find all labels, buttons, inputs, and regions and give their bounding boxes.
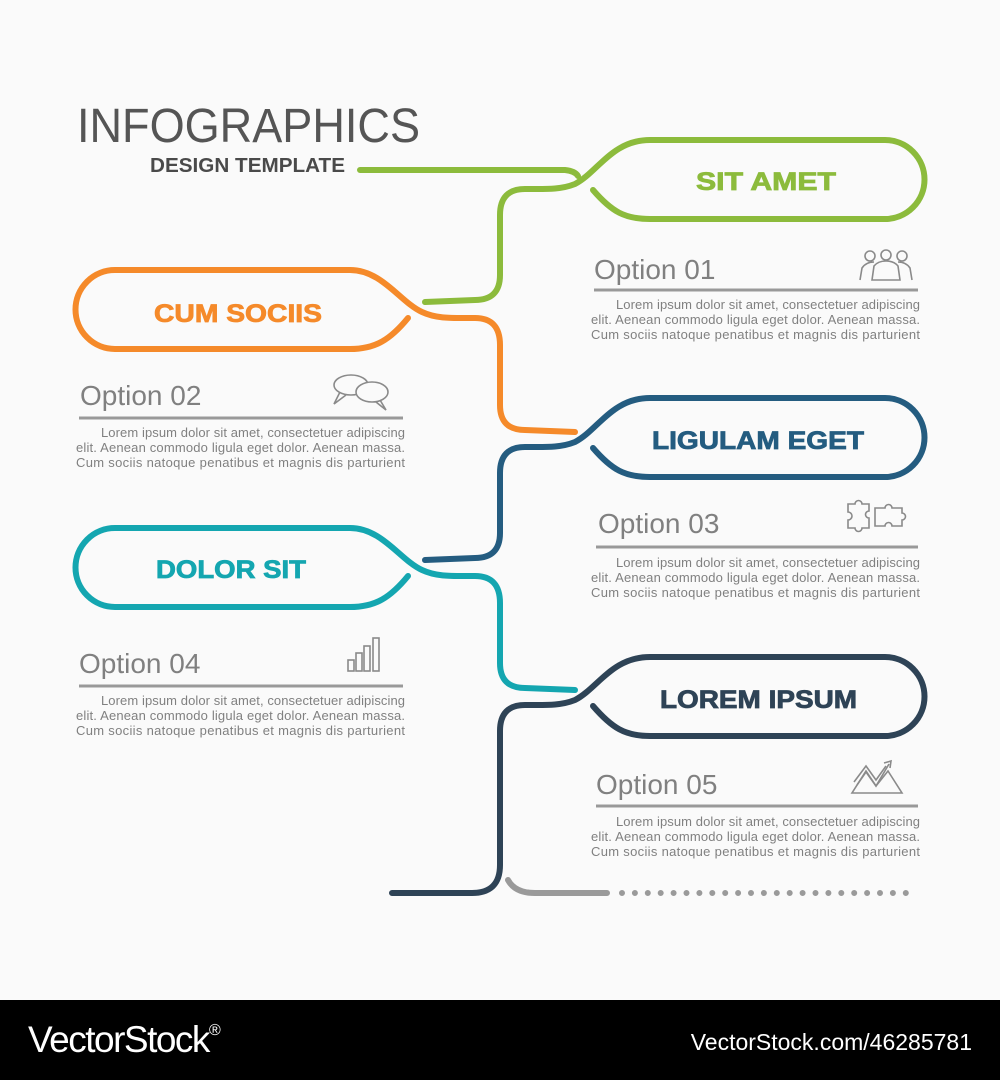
icon: people: [860, 250, 912, 280]
pill: ligulam eget: LIGULAM EGET: [652, 427, 864, 455]
option 02: Lorem ipsum dolor sit amet, consectetuer adipiscing: [101, 425, 405, 440]
icon: puzzle: [848, 500, 906, 532]
icon: growth chart: [852, 761, 902, 793]
option 05: Cum sociis natoque penatibus et magnis dis parturient: [591, 844, 920, 859]
title: [77, 100, 420, 177]
pill: dolor sit: DOLOR SIT: [156, 556, 306, 584]
gray end line with dots: [508, 880, 918, 893]
title: INFOGRAPHICS: [77, 100, 420, 153]
option 01: Lorem ipsum dolor sit amet, consectetuer adipiscing: [616, 297, 920, 312]
footer bar: VectorStock: [28, 1019, 209, 1060]
title: DESIGN TEMPLATE: [150, 155, 345, 177]
option 03: Lorem ipsum dolor sit amet, consectetuer adipiscing: [616, 555, 920, 570]
pill: sit amet: SIT AMET: [696, 168, 836, 196]
green lead line: [360, 170, 578, 176]
option 02: [76, 380, 405, 470]
pill: lorem ipsum: LOREM IPSUM: [660, 686, 857, 714]
option 02: elit. Aenean commodo ligula eget dolor. Aenean massa.: [76, 440, 405, 455]
option 05: Option 05: [596, 769, 717, 800]
footer bar: ®: [209, 1022, 221, 1039]
option 03: [591, 508, 920, 600]
footer bar: VectorStock.com/46285781: [691, 1029, 972, 1055]
pill: ligulam eget: [425, 398, 924, 560]
pill: dolor sit: [76, 528, 575, 690]
option 04: [76, 648, 405, 738]
option 04: Lorem ipsum dolor sit amet, consectetuer adipiscing: [101, 693, 405, 708]
pill: cum sociis: [76, 270, 575, 432]
option 04: Option 04: [79, 648, 200, 679]
option 02: Cum sociis natoque penatibus et magnis dis parturient: [76, 455, 405, 470]
pill: lorem ipsum: [392, 657, 924, 893]
footer bar: [0, 1000, 1000, 1080]
option 02: Option 02: [80, 380, 201, 411]
option 03: Cum sociis natoque penatibus et magnis dis parturient: [591, 585, 920, 600]
option 04: elit. Aenean commodo ligula eget dolor. Aenean massa.: [76, 708, 405, 723]
option 03: elit. Aenean commodo ligula eget dolor. Aenean massa.: [591, 570, 920, 585]
option 05: [591, 769, 920, 859]
option 01: Option 01: [594, 254, 715, 285]
icon: bar chart: [348, 638, 379, 671]
pill: cum sociis: CUM SOCIIS: [154, 300, 322, 328]
icon: speech bubbles: [334, 375, 388, 410]
option 05: Lorem ipsum dolor sit amet, consectetuer adipiscing: [616, 814, 920, 829]
option 01: Cum sociis natoque penatibus et magnis dis parturient: [591, 327, 920, 342]
option 01: [591, 254, 920, 342]
option 01: elit. Aenean commodo ligula eget dolor. Aenean massa.: [591, 312, 920, 327]
option 03: Option 03: [598, 508, 719, 539]
option 05: elit. Aenean commodo ligula eget dolor. Aenean massa.: [591, 829, 920, 844]
option 04: Cum sociis natoque penatibus et magnis dis parturient: [76, 723, 405, 738]
pill: sit amet: [425, 140, 924, 302]
